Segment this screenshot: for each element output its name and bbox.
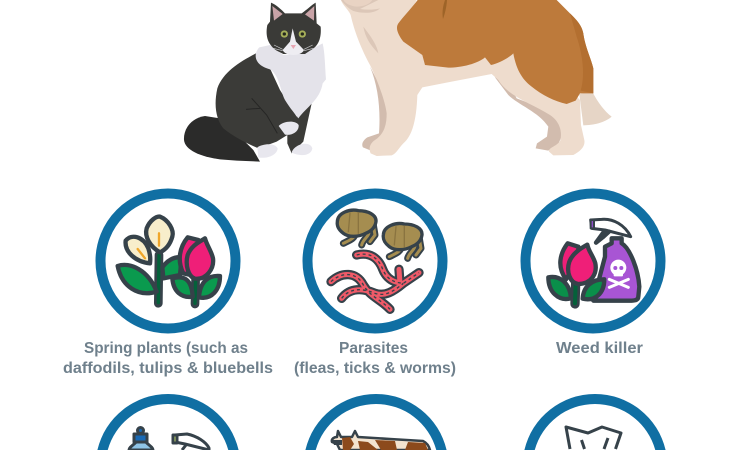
flea 2 xyxy=(383,223,422,258)
label: Weed killer xyxy=(556,340,643,357)
icon: cow xyxy=(332,431,430,450)
ring xyxy=(305,394,447,450)
panel: spring plants xyxy=(63,194,273,377)
ring xyxy=(524,394,666,450)
ring xyxy=(526,194,660,328)
worms xyxy=(331,254,419,309)
icon: flowers xyxy=(118,217,220,304)
cat chest xyxy=(256,43,326,118)
ring xyxy=(308,194,442,328)
cat body xyxy=(216,53,312,153)
cat tail xyxy=(184,116,260,162)
cat paws xyxy=(257,122,312,158)
ring xyxy=(100,194,236,328)
panel: plastic bag xyxy=(524,394,666,450)
icon: fleas and worms xyxy=(331,210,422,309)
icon: weed killer xyxy=(548,219,639,304)
label: Spring plants (such as xyxy=(84,340,248,357)
ring xyxy=(97,394,239,450)
panel: parasites: (fleas, ticks & worms) xyxy=(294,360,456,377)
panel: cleaning products xyxy=(97,394,239,450)
panel: parasites xyxy=(294,194,456,377)
illustration: dog xyxy=(341,0,612,156)
icon: bag xyxy=(566,427,621,449)
label: Parasites xyxy=(339,340,408,357)
panel: spring plants: daffodils, tulips & bluebells xyxy=(63,360,273,377)
illustration: cat xyxy=(184,3,326,162)
icon: bottle and sprayer xyxy=(129,428,209,450)
panel: weed killer xyxy=(526,194,660,357)
cat head xyxy=(267,3,321,54)
flea 1 xyxy=(337,210,376,245)
panel: cow xyxy=(305,394,447,450)
